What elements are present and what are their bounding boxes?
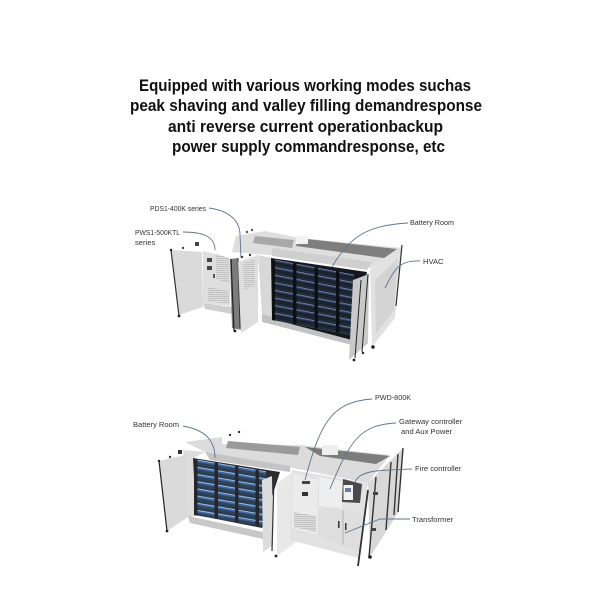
battery rack	[271, 258, 367, 340]
fire controller	[342, 479, 362, 503]
label: PWD-800K: PWD-800K	[375, 393, 411, 402]
left wall of room	[258, 255, 274, 320]
label: top Battery Room: Battery Room	[410, 218, 454, 227]
label: HVAC: HVAC	[423, 257, 444, 266]
floor strip	[262, 314, 352, 345]
leader: bottom Battery Room	[183, 426, 215, 458]
right door pair	[349, 274, 369, 360]
leader: PDS1-400K series	[209, 208, 241, 258]
roof	[185, 437, 390, 483]
gateway panel	[319, 477, 342, 508]
left inner wall	[183, 450, 205, 517]
leader: Transformer	[345, 519, 410, 533]
lower transformer cabinets	[318, 507, 361, 552]
label: PDS1-400K series: PDS1-400K series	[150, 204, 206, 213]
illustration: top storage unit, battery room side	[170, 229, 402, 361]
middle doors	[262, 476, 273, 552]
left door	[159, 455, 188, 531]
title: Equipped with various working modes suchas	[139, 76, 471, 95]
title	[130, 76, 482, 156]
leader: Fire controller	[355, 469, 412, 482]
floor	[188, 516, 263, 539]
leader: HVAC	[385, 261, 420, 288]
battery rack	[193, 458, 280, 528]
label: bottom Battery Room: Battery Room	[133, 420, 179, 429]
left door	[171, 250, 203, 315]
right side wall	[368, 448, 403, 557]
title: peak shaving and valley filling demandresponse	[130, 96, 482, 115]
front door	[238, 255, 258, 333]
right wall HVAC	[370, 246, 402, 347]
title: anti reverse current operationbackup	[168, 117, 443, 136]
PWD cabinet	[292, 473, 318, 535]
leader: top Battery Room	[332, 223, 408, 267]
label: PWS1-500KTL series: series	[135, 238, 155, 247]
bolts	[169, 456, 171, 458]
middle double door	[230, 258, 241, 330]
bolts	[246, 231, 248, 233]
label: Fire controller: Fire controller	[415, 464, 462, 473]
left inner panel	[203, 251, 230, 306]
label: PWS1-500KTL series: PWS1-500KTL	[135, 228, 180, 237]
leader: PWD-800K	[305, 399, 372, 480]
front face	[290, 470, 368, 558]
leader: Gateway controller	[330, 423, 396, 489]
label: Transformer: Transformer	[412, 515, 454, 524]
label: Gateway controller and Aux Power: Gateway controller	[399, 417, 462, 426]
leader: PWS1-500KTL series	[183, 232, 215, 250]
title: power supply commandresponse, etc	[172, 137, 445, 156]
roof	[232, 231, 402, 268]
label: Gateway controller and Aux Power: and Aux Power	[401, 427, 453, 436]
illustration: bottom storage unit, equipment side	[158, 431, 403, 566]
